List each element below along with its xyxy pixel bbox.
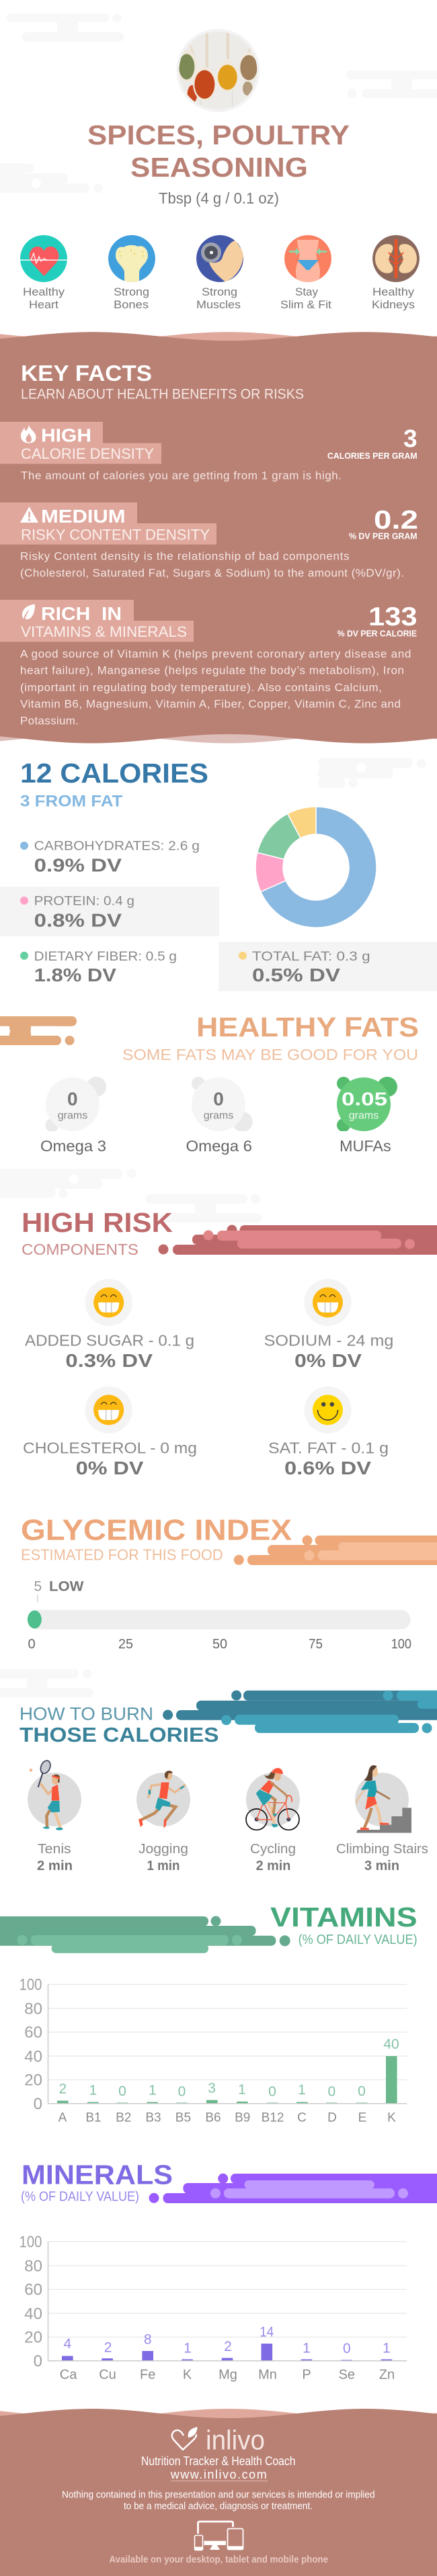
icon: warning triangle <box>20 506 38 523</box>
bubble: mufas: grams <box>349 1110 379 1122</box>
background cloud <box>318 758 426 788</box>
value labels <box>63 2325 391 2356</box>
y axis labels: 60 <box>24 2024 42 2042</box>
category labels: Se <box>339 2368 355 2383</box>
category labels: C <box>297 2111 307 2125</box>
y axis labels: 20 <box>24 2072 42 2090</box>
value labels: 2 <box>104 2340 112 2356</box>
label: mufas: MUFAs <box>340 1137 391 1155</box>
title: SEASONING <box>130 152 308 183</box>
label: slim and fit: Slim & Fit <box>280 298 331 311</box>
chart grid <box>48 1984 407 2080</box>
legend: total fat: 0.5% DV <box>252 965 340 985</box>
legend: carbohydrates <box>20 839 200 875</box>
description: heart failure), Manganese (helps regulate the body’s metabolism), Iron <box>20 664 404 677</box>
icon: cyclist <box>246 1768 300 1830</box>
activity: cycling <box>246 1768 300 1873</box>
category labels: P <box>302 2368 311 2383</box>
axis lines <box>48 1984 407 2104</box>
legend: total fat <box>239 949 370 985</box>
fact: risky content density <box>0 502 418 579</box>
panel: calories <box>0 758 437 991</box>
activity: tennis: 2 min <box>37 1859 73 1873</box>
category labels: K <box>387 2111 396 2125</box>
activity: jogging: Jogging <box>138 1842 188 1857</box>
background clouds: high risk <box>0 1169 262 1223</box>
value labels: 40 <box>383 2037 399 2052</box>
icon: tennis player <box>28 1759 81 1830</box>
subheading: 3 from fat: 3 FROM FAT <box>20 793 123 811</box>
bars <box>62 2344 392 2361</box>
gauge scale <box>28 1637 411 1652</box>
gauge track <box>28 1610 411 1630</box>
icon: jogger <box>136 1771 190 1828</box>
category labels: B1 <box>85 2111 102 2125</box>
availability note: Available on your desktop, tablet and mobile phone <box>109 2554 328 2565</box>
gauge scale: 75 <box>309 1637 323 1652</box>
legend: carbohydrates: CARBOHYDRATES: 2.6 g <box>34 839 200 854</box>
y axis labels: 80 <box>24 2257 42 2275</box>
decoration: orange bars <box>234 1536 437 1565</box>
y axis labels <box>19 1976 42 2113</box>
value labels: 0 <box>328 2084 335 2100</box>
heading: 12 calories: 12 CALORIES <box>20 758 208 789</box>
description <box>20 648 411 727</box>
y axis labels: 100 <box>19 1976 42 1994</box>
food photo: spices on wooden spoons <box>176 28 261 113</box>
risk item: added sugar <box>25 1279 194 1371</box>
logo: inlivo: inlivo <box>206 2425 265 2456</box>
category labels: Ca <box>60 2368 77 2383</box>
value: 3: 3 <box>403 425 418 453</box>
serving size: Tbsp (4 g / 0.1 oz) <box>159 189 279 207</box>
category labels <box>58 2111 396 2125</box>
legend: carbohydrates: 0.9% DV <box>34 854 122 875</box>
legend: dietary fiber: 1.8% DV <box>34 965 116 985</box>
category labels: B5 <box>175 2111 191 2125</box>
label: heart: Heart <box>29 298 58 311</box>
icon: devices <box>194 2522 243 2550</box>
unit: % dv per gram: % DV PER GRAM <box>349 531 418 541</box>
subheading: SOME FATS MAY BE GOOD FOR YOU <box>122 1046 418 1063</box>
value labels: 0 <box>358 2084 366 2099</box>
risk item: cholesterol: 0% DV <box>76 1458 144 1478</box>
legend: total fat: TOTAL FAT: 0.3 g <box>252 949 370 964</box>
value labels: 1 <box>149 2082 157 2098</box>
description: Potassium. <box>20 714 79 727</box>
disclaimer <box>62 2489 375 2512</box>
label: omega 3: Omega 3 <box>40 1137 106 1155</box>
y axis labels: 40 <box>24 2305 42 2323</box>
value: 0.2: 0.2 <box>374 506 418 535</box>
icon: grinning face <box>85 1386 132 1433</box>
panel: how to burn those calories <box>19 1690 437 1873</box>
bar chart: vitamins <box>19 1976 407 2125</box>
label: stay: Stay <box>295 285 318 298</box>
category labels: Zn <box>379 2368 395 2383</box>
bubble: omega 3 <box>46 1077 106 1132</box>
legend: protein: 0.8% DV <box>34 909 122 930</box>
bubble: mufas <box>337 1077 397 1132</box>
bubble: mufas: 0.05 <box>342 1089 387 1110</box>
category labels: A <box>58 2111 67 2125</box>
category labels: E <box>358 2111 366 2125</box>
icon: grinning face <box>304 1279 351 1326</box>
gauge scale: 50 <box>212 1637 227 1652</box>
decoration: red bars <box>159 1225 437 1255</box>
unit: % dv per calorie: % DV PER CALORIE <box>337 629 417 638</box>
axis lines <box>48 2241 407 2361</box>
icon: stay slim and fit <box>284 235 331 282</box>
label: kidneys: Kidneys <box>372 298 415 311</box>
disclaimer: Nothing contained in this presentation and our services is intended or implied <box>62 2489 375 2500</box>
value labels: 3 <box>208 2081 216 2096</box>
gray legend rows <box>0 887 437 991</box>
value: 133: 133 <box>368 603 418 631</box>
bars <box>57 2056 397 2104</box>
subheading: LEARN ABOUT HEALTH BENEFITS OR RISKS <box>21 387 304 402</box>
risk item: sodium: SODIUM - 24 mg <box>264 1331 393 1349</box>
health benefit icons <box>20 235 420 311</box>
legend: protein <box>20 894 134 930</box>
category labels: B9 <box>235 2111 250 2125</box>
title <box>87 120 350 183</box>
icon: healthy heart <box>20 235 67 282</box>
background cloud: burn <box>0 1669 93 1697</box>
y axis labels: 40 <box>24 2047 42 2066</box>
subheading: ESTIMATED FOR THIS FOOD <box>21 1546 223 1564</box>
y axis labels: 20 <box>24 2329 42 2347</box>
rating: high: HIGH <box>41 425 91 446</box>
legend: dietary fiber <box>20 949 177 985</box>
heading: those calories: THOSE CALORIES <box>19 1723 219 1746</box>
y axis labels: 80 <box>24 2000 42 2018</box>
description: Risky Content density is the relationship of bad components <box>20 549 350 563</box>
activity: climbing stairs: Climbing Stairs <box>336 1842 428 1857</box>
category labels: Cu <box>99 2368 116 2383</box>
value labels: 1 <box>303 2341 311 2356</box>
bubble: omega 6 <box>192 1077 253 1132</box>
y axis labels: 60 <box>24 2281 42 2299</box>
description <box>20 549 404 579</box>
value labels: 1 <box>383 2341 391 2356</box>
decoration: orange bars <box>0 1016 77 1045</box>
website link: www.inlivo.com <box>170 2468 267 2481</box>
description: Vitamin B6, Magnesium, Vitamin A, Fiber, Copper, Vitamin C, Zinc and <box>20 697 401 711</box>
label: strong muscles: Strong <box>202 285 237 298</box>
subheading: (% OF DAILY VALUE) <box>21 2190 139 2205</box>
risk item: sodium: 0% DV <box>294 1350 362 1371</box>
rating: medium: MEDIUM <box>41 506 126 527</box>
label: healthy heart: Healthy <box>23 285 65 298</box>
value labels: 0 <box>268 2084 276 2100</box>
bubble: omega 3: 0 <box>67 1089 78 1110</box>
category labels: B3 <box>145 2111 161 2125</box>
label: omega 6: Omega 6 <box>186 1137 252 1155</box>
label: bones: Bones <box>114 298 149 311</box>
activity: tennis: Tenis <box>38 1842 71 1857</box>
bubble: omega 3: grams <box>58 1110 87 1122</box>
value labels: 2 <box>224 2339 232 2354</box>
icon: strong bones <box>108 235 155 285</box>
label: vitamins and minerals: VITAMINS & MINERALS <box>21 623 187 640</box>
label: muscles: Muscles <box>196 298 241 311</box>
panel: glycemic index <box>21 1514 437 1652</box>
y axis labels: 0 <box>34 2095 42 2113</box>
risk item: added sugar: 0.3% DV <box>65 1350 153 1371</box>
chart grid <box>48 2241 407 2337</box>
value labels <box>58 2037 399 2100</box>
heading: high risk: HIGH RISK <box>22 1207 173 1238</box>
y axis labels: 0 <box>34 2352 42 2370</box>
decoration: green bars <box>0 1916 290 1953</box>
category labels: Mn <box>258 2368 277 2383</box>
panel: minerals <box>19 2160 437 2383</box>
risk item: cholesterol: CHOLESTEROL - 0 mg <box>23 1439 197 1456</box>
panel: vitamins <box>0 1902 418 2125</box>
panel: high risk <box>22 1207 437 1478</box>
description: A good source of Vitamin K (helps prevent coronary artery disease and <box>20 648 411 660</box>
value labels: 1 <box>238 2082 246 2097</box>
value labels: 1 <box>89 2082 97 2098</box>
marker: value 5 low: LOW <box>49 1579 84 1594</box>
subheading: components: COMPONENTS <box>22 1241 138 1258</box>
fact: rich in vitamins and minerals <box>0 600 418 727</box>
disclaimer: to be a medical advice, diagnosis or treatment. <box>124 2501 313 2512</box>
panel: healthy fats <box>0 1012 419 1155</box>
bar chart: minerals <box>19 2233 407 2383</box>
risk item: saturated fat: SAT. FAT - 0.1 g <box>268 1439 389 1456</box>
background clouds: header <box>0 13 437 193</box>
label: healthy kidneys: Healthy <box>372 285 415 298</box>
activity: climbing stairs: 3 min <box>364 1859 399 1873</box>
icon: healthy kidneys <box>372 235 420 282</box>
legend: protein: PROTEIN: 0.4 g <box>34 894 134 909</box>
icon: stair climber <box>355 1765 411 1833</box>
title: SPICES, POULTRY <box>87 120 350 150</box>
value labels: 0 <box>178 2084 186 2100</box>
risk item: saturated fat <box>268 1386 389 1478</box>
icon: leaf <box>22 605 35 619</box>
category labels: Mg <box>218 2368 237 2383</box>
footer <box>0 2409 437 2576</box>
activity: cycling: 2 min <box>256 1859 290 1873</box>
icon: smiling face <box>304 1386 351 1433</box>
category labels: B6 <box>205 2111 221 2125</box>
y axis labels <box>19 2233 42 2370</box>
heading: healthy fats: HEALTHY FATS <box>196 1012 419 1042</box>
decoration: teal bars <box>163 1690 437 1733</box>
description: (Cholesterol, Saturated Fat, Sugars & Sodium) to the amount (%DV/gr). <box>20 566 404 579</box>
activity: tennis <box>28 1759 81 1873</box>
label: calorie density: CALORIE DENSITY <box>21 445 154 462</box>
subheading: (% OF DAILY VALUE) <box>299 1933 418 1947</box>
risk item: added sugar: ADDED SUGAR - 0.1 g <box>25 1331 194 1349</box>
unit: calories per gram: CALORIES PER GRAM <box>327 451 418 461</box>
activity: climbing stairs <box>336 1765 428 1873</box>
logo: inlivo <box>172 2425 265 2456</box>
activity: cycling: Cycling <box>250 1842 296 1857</box>
category labels: Fe <box>140 2368 155 2383</box>
gauge scale: 100 <box>391 1637 411 1652</box>
heading: minerals: MINERALS <box>22 2160 173 2190</box>
activity: jogging: 1 min <box>147 1859 180 1873</box>
heading: glycemic index: GLYCEMIC INDEX <box>21 1514 292 1547</box>
gauge scale: 25 <box>118 1637 133 1652</box>
value labels: 1 <box>184 2341 192 2356</box>
label: strong bones: Strong <box>114 285 149 298</box>
y axis labels: 100 <box>19 2233 42 2252</box>
risk item: cholesterol <box>23 1386 197 1478</box>
donut chart <box>255 807 376 928</box>
risk item: sodium <box>264 1279 393 1371</box>
description: (important in regulating body temperature). Also contains Calcium, <box>20 681 382 694</box>
label: risky content density: RISKY CONTENT DENSITY <box>21 526 210 543</box>
category labels: B2 <box>116 2111 131 2125</box>
decoration: purple bars <box>149 2174 437 2203</box>
value labels: 8 <box>144 2331 152 2347</box>
marker: value 5 low: 5 <box>34 1579 42 1594</box>
gauge scale: 0 <box>28 1637 36 1652</box>
heading: how to burn: HOW TO BURN <box>19 1704 153 1724</box>
fact: calorie density <box>0 422 418 482</box>
marker: value 5 low <box>34 1579 84 1602</box>
icon: grinning face <box>85 1279 132 1326</box>
panel: key facts <box>0 332 437 743</box>
category labels: B12 <box>262 2111 284 2125</box>
icon: flame <box>21 425 36 443</box>
value labels: 14 <box>260 2325 274 2340</box>
value labels: 0 <box>118 2084 126 2099</box>
heading: vitamins: VITAMINS <box>270 1902 418 1933</box>
tagline: Nutrition Tracker & Health Coach <box>141 2454 296 2468</box>
risk item: saturated fat: 0.6% DV <box>284 1458 371 1478</box>
description: The amount of calories you are getting from 1 gram is high. <box>21 469 342 482</box>
heading: key facts: KEY FACTS <box>21 361 152 386</box>
value labels: 1 <box>298 2082 306 2098</box>
value labels: 4 <box>63 2336 71 2352</box>
bubble: omega 6: 0 <box>213 1089 224 1110</box>
icon: strong muscles <box>196 235 243 282</box>
activity: jogging <box>136 1771 190 1873</box>
rating: rich in: RICH IN <box>41 603 122 624</box>
value labels: 0 <box>343 2341 351 2356</box>
bubble: omega 6: grams <box>204 1110 233 1122</box>
category labels: K <box>183 2368 192 2383</box>
category labels <box>60 2368 395 2383</box>
value labels: 2 <box>58 2082 67 2097</box>
legend: dietary fiber: DIETARY FIBER: 0.5 g <box>34 949 177 964</box>
gauge indicator <box>28 1611 42 1628</box>
category labels: D <box>327 2111 337 2125</box>
